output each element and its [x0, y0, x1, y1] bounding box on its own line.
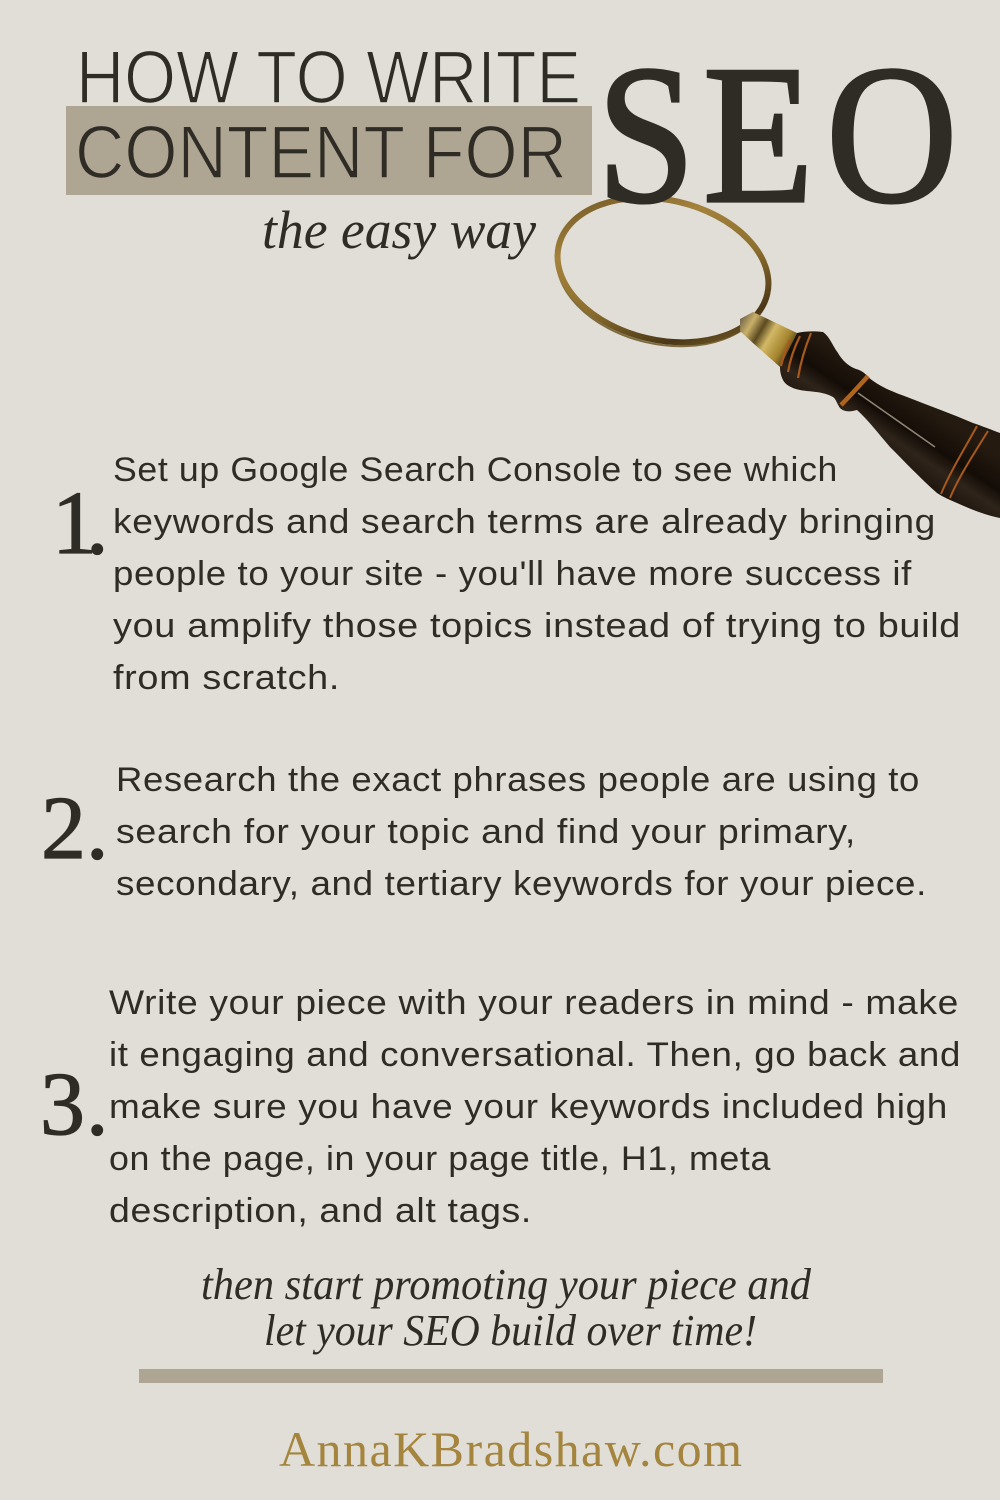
title: SEO: S [597, 25, 695, 244]
step 2 text: search for your topic and find your primary, [116, 813, 856, 851]
closing message: then start promoting your piece and [201, 1260, 812, 1309]
title: SEO: O [826, 25, 958, 245]
number 1: 1 [52, 474, 97, 573]
number 2: 2 [41, 779, 86, 878]
closing message: let your SEO build over time! [264, 1306, 757, 1355]
title: how to write: HOW TO WRITE [76, 35, 581, 119]
step 2 text: Research the exact phrases people are using to [116, 761, 920, 799]
icon: magnifying glass [542, 178, 1000, 518]
step 2 text [116, 761, 927, 903]
step 1 text: Set up Google Search Console to see which [113, 451, 838, 489]
step 3 text: on the page, in your page title, H1, meta [109, 1140, 771, 1178]
step 1 text: keywords and search terms are already bringing [113, 503, 936, 541]
number 2: . [86, 779, 108, 878]
step 2 [41, 761, 927, 903]
number 3: 3 [40, 1055, 85, 1154]
step 1 text [113, 451, 961, 697]
title band [66, 106, 592, 195]
step 1 text: people to your site - you'll have more success if [113, 555, 912, 593]
step 1 text: you amplify those topics instead of trying to build [113, 607, 961, 645]
step 3 text: Write your piece with your readers in mind - make [109, 984, 959, 1022]
step 3 text: description, and alt tags. [109, 1192, 532, 1230]
step 3 [40, 984, 961, 1230]
title: SEO: E [703, 26, 814, 245]
number 1: . [86, 474, 108, 573]
step 1 [52, 451, 961, 697]
step 3 text: it engaging and conversational. Then, go back and [109, 1036, 961, 1074]
subtitle: the easy way [262, 200, 536, 260]
step 2 text: secondary, and tertiary keywords for your piece. [116, 865, 927, 903]
step 1 text: from scratch. [113, 659, 340, 697]
website: AnnaKBradshaw.com [279, 1421, 742, 1477]
step 3 text [109, 984, 961, 1230]
step 3 text: make sure you have your keywords included high [109, 1088, 948, 1126]
number 3: . [86, 1055, 108, 1154]
title: content for: CONTENT FOR [75, 110, 567, 194]
title: SEO [597, 25, 958, 245]
divider bar [139, 1369, 883, 1383]
closing message [201, 1260, 812, 1355]
